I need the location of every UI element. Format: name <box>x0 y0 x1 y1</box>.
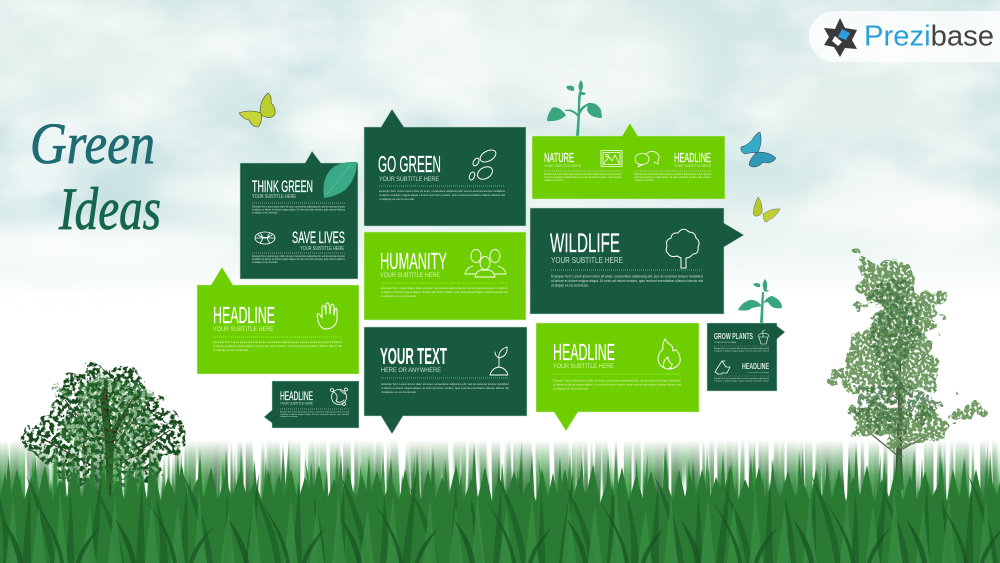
icon: speech bubbles <box>635 151 659 167</box>
body text: your text: ut labore et dolore magna aliqua. Ut enim ad minim veniam, quis nostrud exercitation ullamco laboris nisi <box>381 386 509 390</box>
body text: nature right: Example Text: Lorem ipsum dolor sit amet, consectetur adipiscing elit, sed do eiusmod <box>634 173 712 176</box>
body text: headline left: ut aliquip ex ea commodo. <box>213 348 249 352</box>
icon: leaf <box>323 162 357 198</box>
heading: grow plants right headline: HEADLINE <box>742 361 769 371</box>
logo: Prezibase <box>809 11 1000 62</box>
panel: go green <box>364 109 526 226</box>
body text: your text <box>381 382 509 394</box>
body text: nature right: ut labore et dolore magna aliqua. Ut enim ad minim veniam, quis nostrud <box>634 176 712 179</box>
icon: tree <box>666 229 699 268</box>
butterfly: yellow small <box>753 197 780 222</box>
plant: top sprout <box>547 80 602 136</box>
panel: small headline: YOUR SUBTITLE HERE <box>280 402 313 406</box>
body text: save lives: incididunt ut labore et dolore magna aliqua. Ut enim ad minim veniam, quis nostrud ullamco <box>252 257 345 261</box>
body text: nature: ut aliquip ex ea commodo. <box>544 179 564 182</box>
body text: go green: Example Text: Lorem ipsum dolor sit amet, consectetur adipiscing elit, sed do eiusmod tempor incididunt <box>379 189 505 193</box>
heading: nature right headline: HEADLINE <box>674 151 711 165</box>
panel: nature / headline <box>532 123 725 199</box>
butterfly: yellow top <box>239 93 275 127</box>
logo wordmark: Prezibase <box>864 20 994 52</box>
body text: think green: ut aliquip ex ea commodo. <box>252 210 278 214</box>
body text: your text: Example Text: Lorem ipsum dolor sit amet, consectetur adipiscing elit, sed do eiusmod tempor incididunt <box>381 382 509 386</box>
body text: grow plants right <box>714 377 770 382</box>
heading: grow plants: GROW PLANTS <box>714 331 753 341</box>
icon: flame <box>658 339 680 369</box>
body text: save lives: Example Text: Lorem ipsum dolor sit amet, consectetur adipiscing elit, sed do eiusmod tempor <box>252 254 345 258</box>
heading: humanity: HUMANITY <box>380 248 447 274</box>
grass <box>0 435 1000 563</box>
body text: nature: Example Text: Lorem ipsum dolor sit amet, consectetur adipiscing elit, sed do eiusmod <box>544 173 622 176</box>
sky background <box>0 0 1000 284</box>
body text: think green <box>252 204 345 214</box>
panel: nature / headline: YOUR SUBTITLE HERE <box>674 164 711 168</box>
panel: nature / headline: YOUR SUBTITLE HERE <box>544 164 581 168</box>
body text: save lives <box>252 254 345 264</box>
panel: wildlife: YOUR SUBTITLE HERE <box>551 256 623 265</box>
panel: grow plants: YOUR SUBTITLE HERE <box>714 342 736 344</box>
body text: go green: ut aliquip ex ea commodo. <box>379 197 415 201</box>
body text: humanity: ut labore et dolore magna aliqua. Ut enim ad minim veniam, quis nostrud exercitation ullamco laboris nisi <box>381 290 508 294</box>
icon: recycle <box>715 361 730 374</box>
body text: headline left: Example Text: Lorem ipsum dolor sit amet, consectetur adipiscing elit, sed do eiusmod tempor incididunt <box>213 340 342 344</box>
icon: potted plant <box>758 330 769 344</box>
panel: headline green right <box>536 323 699 431</box>
heading: save lives: SAVE LIVES <box>292 228 345 247</box>
body text: small headline: ut labore et dolore magna aliqua. Ut enim ad minim veniam, quis nostrud <box>280 413 350 416</box>
body text: go green: ut labore et dolore magna aliqua. Ut enim ad minim veniam, quis nostrud exercitation ullamco laboris nisi <box>379 193 505 197</box>
body text: wildlife: ut aliquip ex ea commodo. <box>551 284 589 288</box>
body text: nature right <box>634 173 712 182</box>
heading: headline: HEADLINE <box>213 302 275 328</box>
panel: think green / save lives: YOUR SUBTITLE HERE <box>300 246 344 252</box>
title: Green Ideas: Green <box>30 111 155 176</box>
body text: nature: ut labore et dolore magna aliqua. Ut enim ad minim veniam, quis nostrud <box>544 176 622 179</box>
body text: grow plants <box>714 347 770 352</box>
panel: your text <box>364 327 527 434</box>
panel: headline green left: YOUR SUBTITLE HERE <box>213 326 274 333</box>
body text: small headline: Example Text: Lorem ipsum dolor sit amet, consectetur adipiscing elit, sed do eiusmod <box>280 410 350 414</box>
body text: think green: Example Text: Lorem ipsum dolor sit amet, consectetur adipiscing elit, sed do eiusmod tempor <box>252 204 345 208</box>
body text: go green <box>379 189 505 201</box>
body text: save lives: ut aliquip ex ea commodo. <box>252 260 278 264</box>
panel: small headline <box>264 381 359 428</box>
body text: your text: ut aliquip ex ea commodo. <box>381 390 417 394</box>
heading: wildlife: WILDLIFE <box>550 228 620 258</box>
butterfly: blue <box>741 132 776 167</box>
body text: grow plants: ut labore et dolore magna aliqua. Ut enim ad minim veniam <box>714 350 770 352</box>
icon: picture <box>601 150 622 166</box>
panel: think green / save lives <box>240 151 358 279</box>
body text: humanity: ut aliquip ex ea commodo. <box>381 294 417 298</box>
icon: earth <box>330 388 348 406</box>
heading: small headline: HEADLINE <box>280 389 313 403</box>
body text: headline right <box>553 378 681 390</box>
panel: headline green right: YOUR SUBTITLE HERE <box>553 363 614 370</box>
icon: logo star <box>824 18 857 57</box>
heading: headline right: HEADLINE <box>553 339 615 365</box>
panel: your text: HERE OR ANYWHERE <box>381 367 441 374</box>
icon: footprints <box>468 148 498 182</box>
panel: think green / save lives: YOUR SUBTITLE HERE <box>252 194 296 200</box>
icon: people <box>465 250 506 277</box>
plant: right sprout <box>738 279 782 323</box>
body text: wildlife: Example Text: Lorem ipsum dolor sit amet, consectetur adipiscing elit, sed do eiusmod tempor incididunt <box>551 274 703 278</box>
icon: hand <box>317 303 337 329</box>
body text: headline left <box>213 340 342 352</box>
body text: headline right: ut aliquip ex ea commodo. <box>553 386 589 390</box>
body text: humanity: Example Text: Lorem ipsum dolor sit amet, consectetur adipiscing elit, sed do eiusmod tempor incididunt <box>381 286 508 290</box>
body text: nature <box>544 173 622 182</box>
panel: go green: YOUR SUBTITLE HERE <box>379 176 439 183</box>
body text: small headline <box>280 410 350 418</box>
tree: right <box>831 254 981 490</box>
panel: wildlife <box>530 208 744 314</box>
body text: wildlife: ut labore et dolore magna aliqua. Ut enim ad minim veniam, quis nostrud exercitation ullamco laboris nisi <box>551 279 703 283</box>
heading: think green: THINK GREEN <box>252 177 313 196</box>
body text: grow plants right: ut labore et dolore magna aliqua. Ut enim ad minim veniam <box>714 380 770 382</box>
body text: think green: incididunt ut labore et dolore magna aliqua. Ut enim ad minim veniam, quis nostrud ullamco <box>252 208 345 212</box>
body text: small headline: ut aliquip ex ea commodo. <box>280 415 298 418</box>
body text: humanity <box>381 286 508 298</box>
body text: headline right: Example Text: Lorem ipsum dolor sit amet, consectetur adipiscing elit, sed do eiusmod tempor incididunt <box>553 378 681 382</box>
heading: go green: GO GREEN <box>378 151 441 177</box>
heading: nature: NATURE <box>544 151 574 165</box>
panel: humanity: YOUR SUBTITLE HERE <box>380 272 440 279</box>
body text: nature right: ut aliquip ex ea commodo. <box>634 179 654 182</box>
panel: headline green left <box>197 267 359 374</box>
panel: grow plants: YOUR SUBTITLE HERE <box>747 372 769 374</box>
panel: grow plants <box>707 323 785 391</box>
body text: grow plants right: Example Text: Lorem ipsum dolor sit amet, consectetur adipiscing elit <box>714 377 769 380</box>
title: Green Ideas: Ideas <box>58 176 161 242</box>
tree: left <box>22 370 190 500</box>
body text: grow plants: Example Text: Lorem ipsum dolor sit amet, consectetur adipiscing elit <box>714 347 769 350</box>
body text: headline right: ut labore et dolore magna aliqua. Ut enim ad minim veniam, quis nostrud exercitation ullamco laboris nisi <box>553 382 681 386</box>
title: Green Ideas <box>30 111 161 242</box>
heading: your text: YOUR TEXT <box>380 343 447 369</box>
body text: headline left: ut labore et dolore magna aliqua. Ut enim ad minim veniam, quis nostrud exercitation ullamco laboris nisi <box>213 344 342 348</box>
icon: sprout <box>490 347 508 375</box>
icon: globe <box>255 232 275 244</box>
body text: wildlife <box>551 274 703 288</box>
panel: humanity <box>364 232 526 320</box>
